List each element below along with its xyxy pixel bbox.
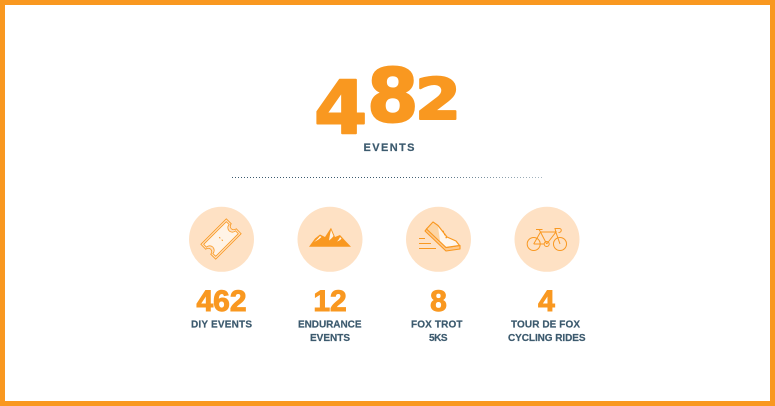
label: DIY EVENTS xyxy=(191,320,252,330)
label xyxy=(508,320,586,344)
headline number: 482: 2 xyxy=(415,66,461,133)
label xyxy=(298,320,362,344)
label: FOX TROT xyxy=(411,320,462,330)
label: EVENTS xyxy=(310,333,350,344)
value: 4 xyxy=(538,285,555,318)
stat: endurance events xyxy=(298,207,362,344)
stat: Tour de Fox cycling rides xyxy=(508,207,586,344)
label: 5KS xyxy=(429,333,448,344)
headline number: 482: 4 xyxy=(314,66,367,151)
label xyxy=(411,320,462,344)
label: TOUR DE FOX xyxy=(511,320,580,330)
icon: bicycle xyxy=(514,207,580,272)
stat: DIY events xyxy=(189,207,254,330)
stat: Fox Trot 5Ks xyxy=(406,207,471,344)
icon: running shoe xyxy=(406,207,471,272)
headline label: EVENTS xyxy=(364,142,414,154)
dotted divider xyxy=(232,176,543,178)
value: 462 xyxy=(196,285,247,318)
icon: mountains xyxy=(298,207,362,272)
value: 12 xyxy=(313,285,347,318)
label: CYCLING RIDES xyxy=(508,333,586,344)
icon: ticket xyxy=(189,207,254,272)
headline number: 482: 8 xyxy=(367,54,418,140)
value: 8 xyxy=(430,285,447,318)
label: ENDURANCE xyxy=(298,320,362,330)
headline number: 482 xyxy=(314,54,461,151)
